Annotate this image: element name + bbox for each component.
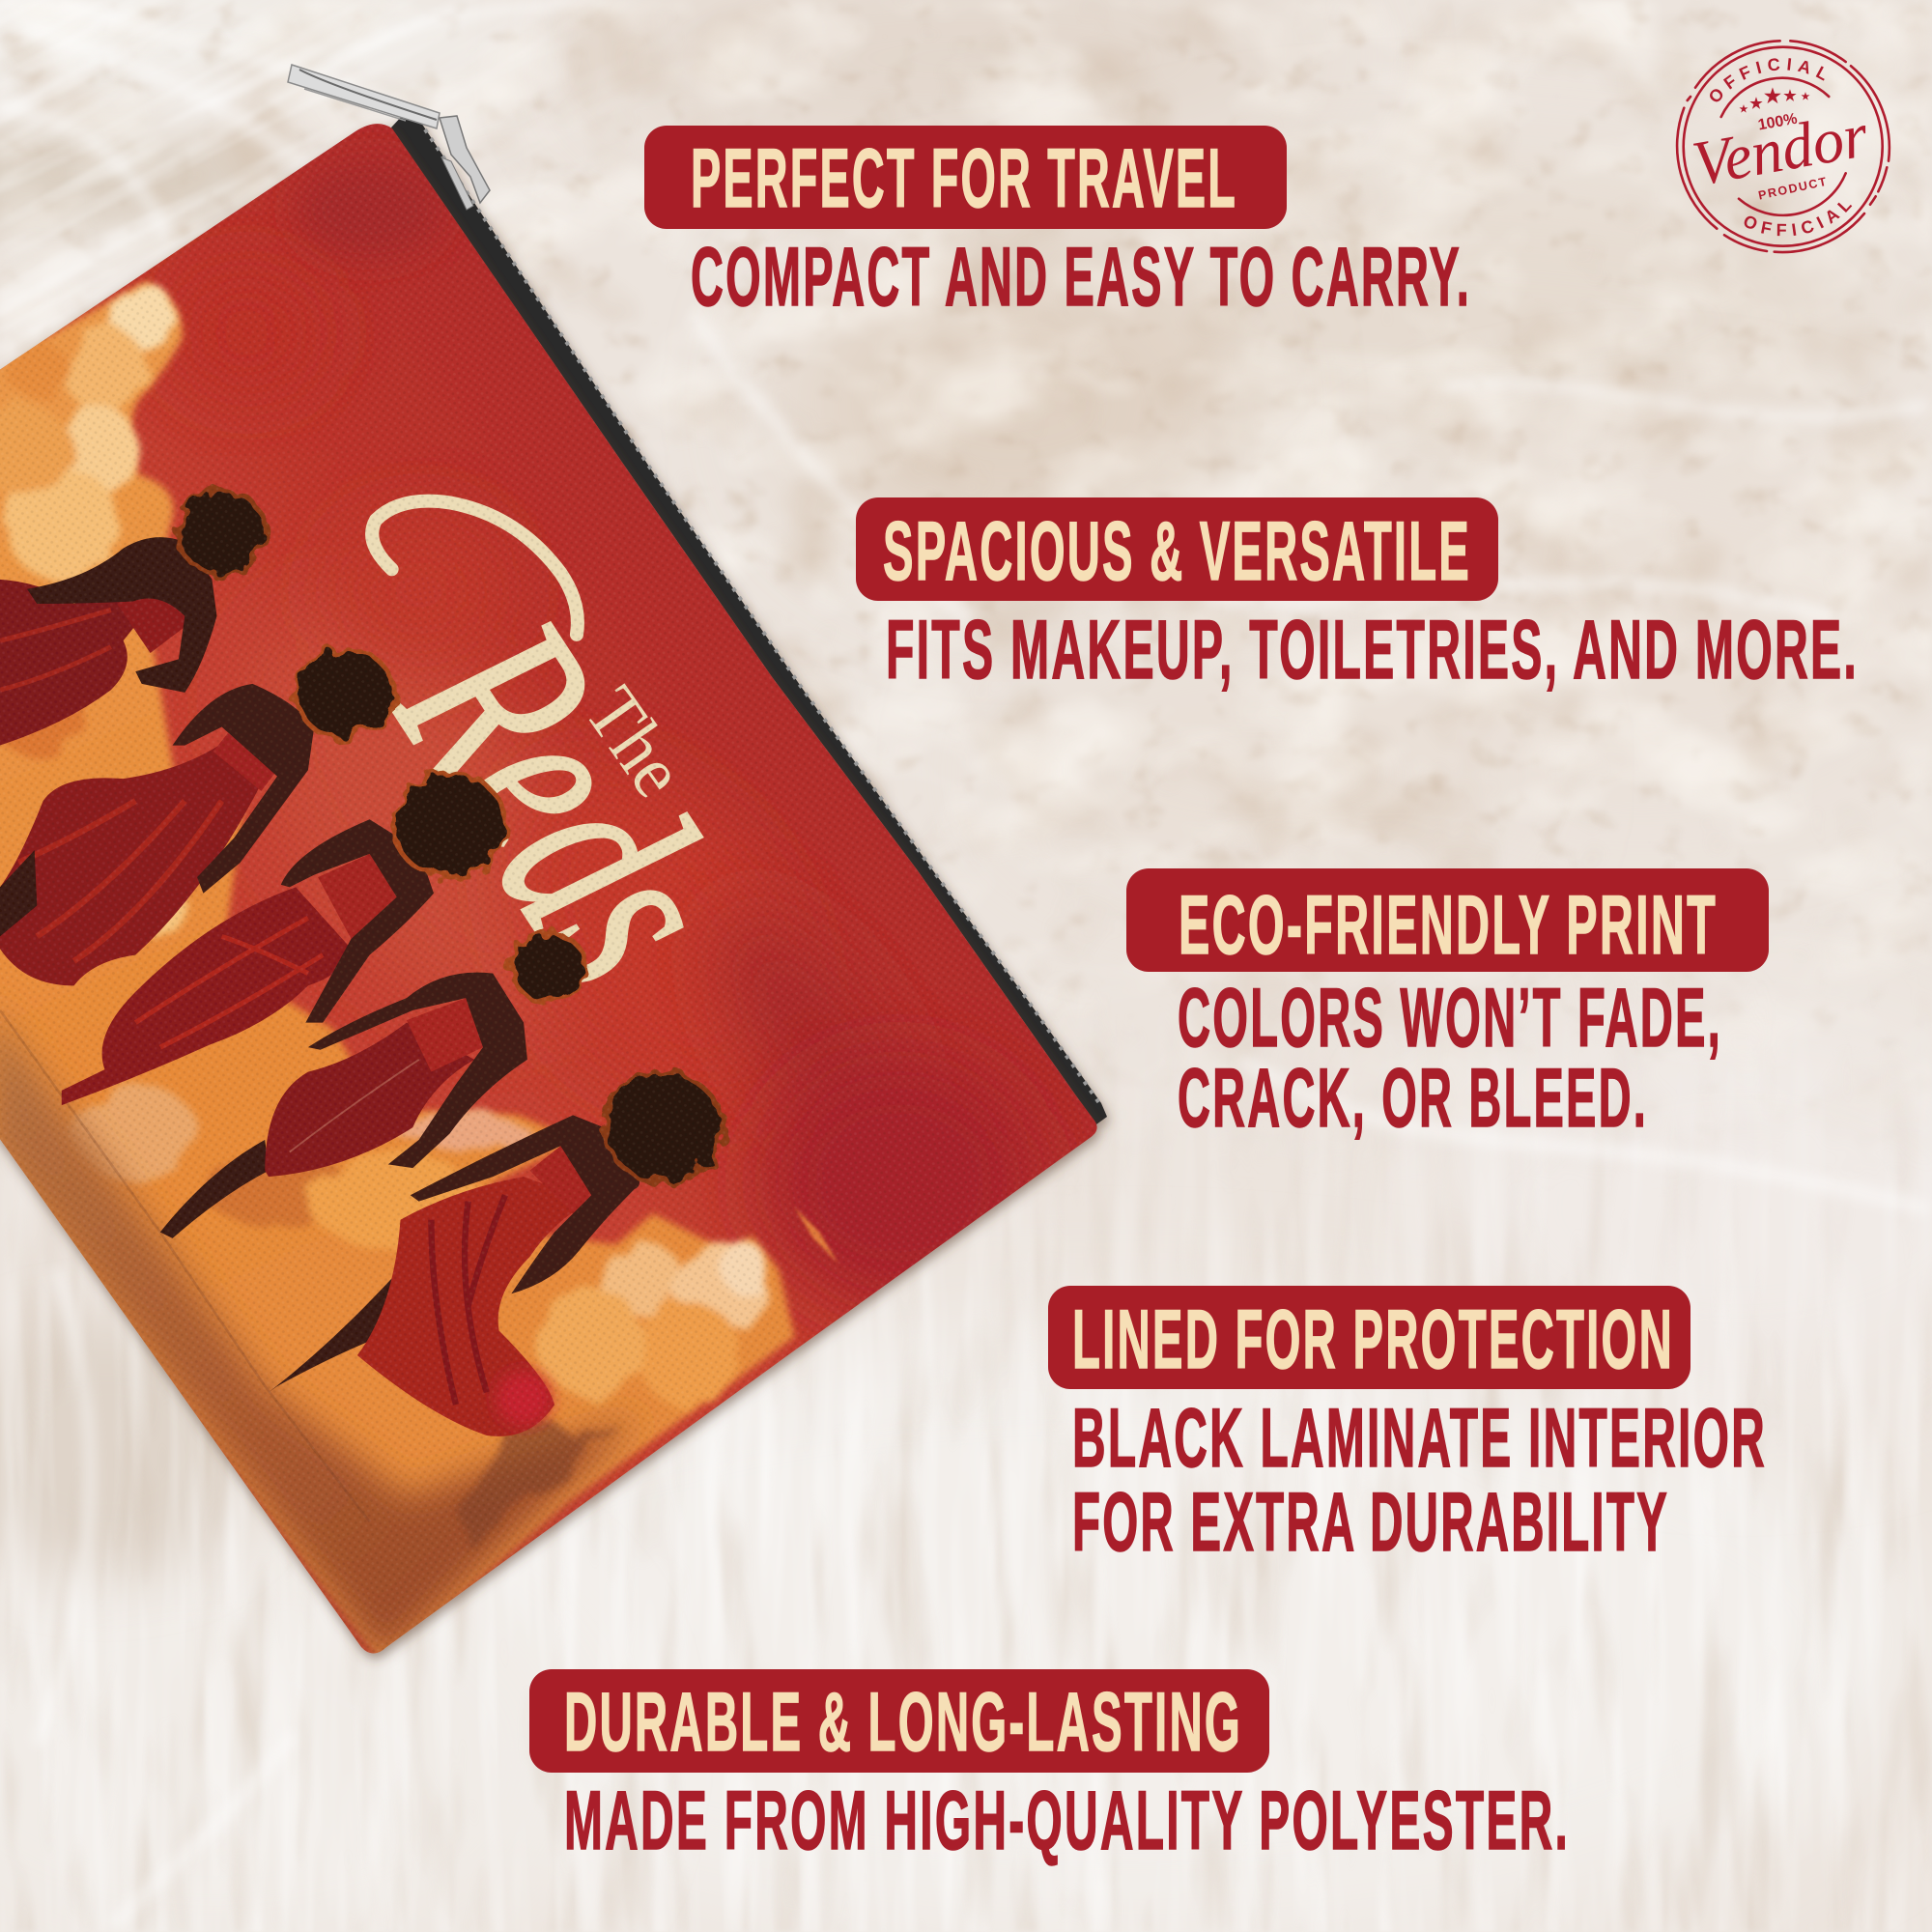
woman silhouette 1 [0,491,267,750]
label pill [644,126,1287,229]
stamp stars: ★ [1802,92,1810,102]
product name: The Reds: The [569,672,701,811]
stamp 100%: 100% [1757,111,1799,133]
label pill [1048,1286,1690,1389]
product name: The Reds [337,501,784,1032]
pouch printed fabric panel [0,121,1106,1665]
badge: official 100% vendor product stamp [1675,40,1891,253]
woman silhouette 3 [62,773,505,1105]
feature: durable and long-lasting [529,1669,1570,1867]
zipper pull: metal slider [288,65,490,210]
product name: The Reds: Reds [337,570,784,1032]
stamp stars: ★ [1749,96,1763,112]
feature: lined for protection [1048,1286,1767,1569]
sky glow [173,160,1035,1306]
label pill [856,497,1498,601]
decorative swash on the script capital [372,501,578,635]
stamp outer dashed ring [1677,41,1889,252]
stamp bottom text: OFFICIAL [1745,203,1853,236]
stamp Vendor script: Vendor [1688,99,1873,200]
product: zippered canvas pouch [0,0,1159,1690]
stamp stars: ★ [1783,88,1797,104]
feature: eco-friendly print [1126,868,1769,1145]
stamp stars: ★ [1764,86,1781,107]
stamp product: PRODUCT [1757,175,1829,203]
orange clouds [0,281,795,1663]
pouch zipper tape and teeth [391,114,1107,1124]
stamp top text: OFFICIAL [1710,58,1825,102]
heading: PERFECT FOR TRAVEL [691,132,1237,225]
stamp stars: ★ [1740,104,1748,115]
label pill [1126,868,1769,972]
lower fold strip and brown corner [0,1005,640,1663]
feature: perfect for travel [644,126,1471,324]
woman silhouette 4 [160,934,586,1238]
feature: spacious and versatile [856,497,1859,696]
woman silhouette 5 [269,1073,722,1436]
heading: DURABLE & LONG-LASTING [564,1676,1242,1769]
woman silhouette 2 [0,649,394,985]
label pill [529,1669,1269,1773]
heading: SPACIOUS & VERSATILE [883,505,1471,598]
stamp stars [1740,86,1810,115]
